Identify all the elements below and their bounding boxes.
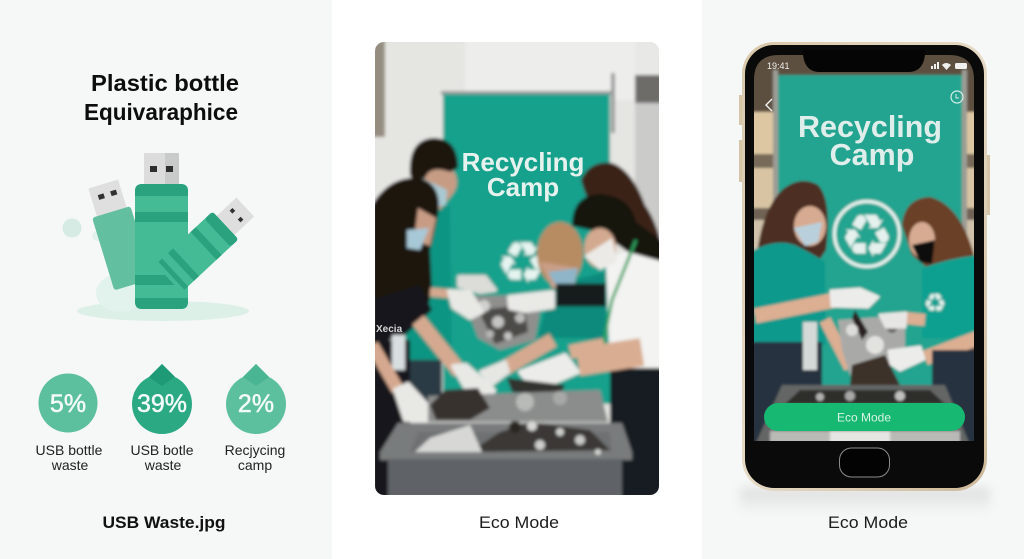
shirt text: Xecia (376, 324, 403, 335)
status icons (931, 62, 967, 70)
stat: 39%: USB botle (130, 442, 194, 458)
pile of plastic (838, 315, 905, 378)
phone screen photo: ♻ (840, 202, 894, 272)
arms (418, 320, 460, 372)
back bin (428, 390, 608, 422)
banner text: Camp (830, 138, 914, 172)
blond woman head (537, 222, 583, 286)
banner text (463, 152, 583, 202)
eco mode button: Eco Mode (837, 410, 891, 424)
eco mode button (764, 403, 965, 431)
screen banner (778, 75, 962, 395)
gloves (831, 289, 924, 370)
photo: recycling camp volunteers (370, 38, 664, 498)
left volunteer (757, 181, 828, 262)
recycle emblem (834, 202, 900, 266)
back chevron (766, 99, 772, 111)
pile held (462, 295, 543, 350)
stat: 5% (36, 374, 103, 473)
stat: 2% (225, 364, 286, 473)
stat: 2%: camp (238, 457, 272, 473)
usb illustration (62, 153, 258, 321)
stat: 5%: waste (51, 457, 88, 473)
man (404, 203, 452, 360)
title (84, 70, 239, 125)
metal scoop (507, 378, 565, 396)
phone mockup (739, 42, 990, 491)
banner text (800, 115, 940, 172)
stat: 5%: 5% (50, 390, 86, 418)
right woman body (602, 251, 659, 369)
panel: phone (702, 0, 1024, 559)
banner text: Camp (487, 172, 559, 202)
banner text: Recycling (462, 147, 584, 177)
caption: eco mode: Eco Mode (479, 513, 559, 532)
phone screen photo: ♻ (923, 289, 947, 319)
stat: 2%: Recjycing (225, 442, 285, 458)
recycle logo on sign: ♻ (496, 229, 548, 297)
stat: 39%: 39% (137, 390, 187, 418)
phone screen photo (750, 50, 978, 447)
stat: 2%: 2% (238, 390, 274, 418)
bin (755, 385, 970, 445)
stat: 39%: waste (144, 457, 181, 473)
teal shirt blond woman (538, 272, 606, 340)
woman back right hair (580, 160, 659, 247)
notch (803, 50, 925, 72)
title: Equivaraphice (84, 99, 238, 125)
help icon (951, 91, 963, 103)
title: Plastic bottle (91, 70, 239, 96)
banner text: Recycling (798, 110, 942, 144)
status bar time: 19:41 (767, 61, 790, 71)
panel: photo (375, 42, 659, 528)
left woman (375, 175, 441, 304)
stat: 39% (130, 364, 194, 473)
right volunteer (902, 197, 974, 272)
caption: usb waste: USB Waste.jpg (102, 513, 226, 532)
front bin (380, 423, 632, 460)
phone shadow (740, 488, 990, 514)
stat: 5%: USB bottle (36, 442, 103, 458)
panel: usb waste (0, 0, 332, 559)
caption: eco mode: Eco Mode (828, 513, 908, 532)
home button (840, 448, 890, 477)
sign (443, 94, 610, 404)
gloves (395, 277, 578, 420)
